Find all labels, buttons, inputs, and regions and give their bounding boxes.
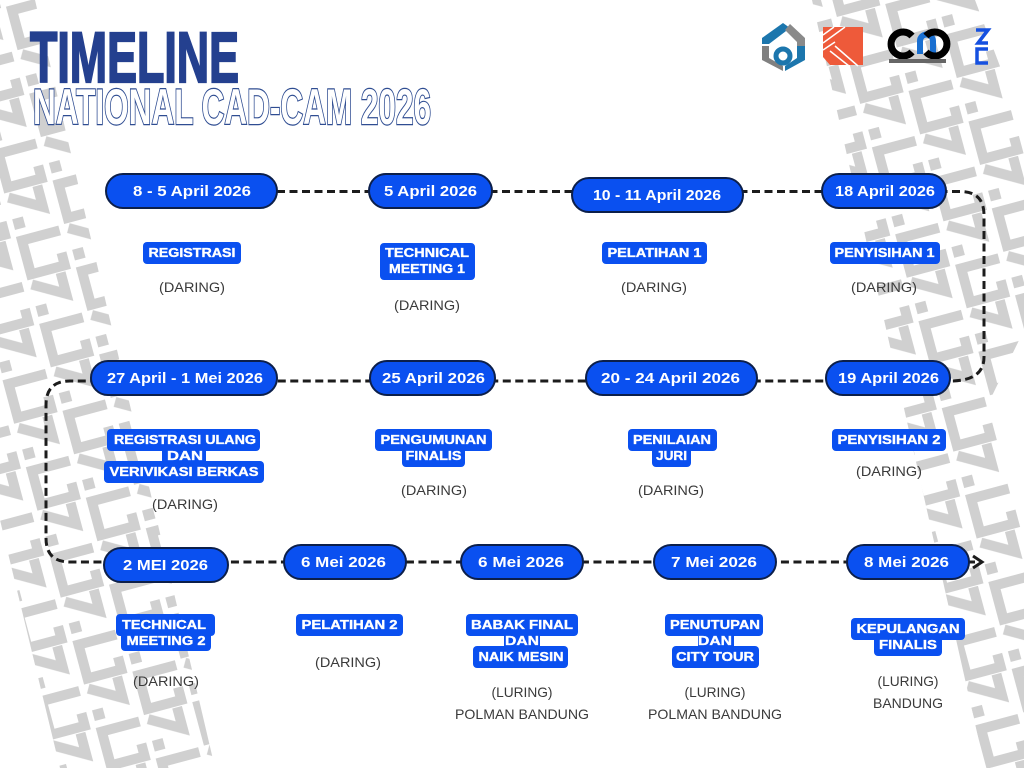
logos <box>762 23 988 71</box>
date pill: 20 - 24 April 2026 <box>586 361 757 395</box>
icon: CNC logo <box>889 32 947 63</box>
label: penutupan dan city tour: CITY TOUR <box>676 649 755 664</box>
arrow head <box>973 556 982 568</box>
background pattern: right band <box>812 0 1024 768</box>
note: luring bandung <box>873 673 943 711</box>
note: luring polman bandung: (LURING) <box>492 684 552 700</box>
note: luring bandung: BANDUNG <box>873 695 943 711</box>
label: penyisihan 2: PENYISIHAN 2 <box>838 432 940 447</box>
date pill: 8 - 5 April 2026 <box>106 174 277 208</box>
label: kepulangan finalis: FINALIS <box>879 637 937 652</box>
background pattern: left band <box>0 0 215 768</box>
label: technical meeting 1: TECHNICAL <box>385 245 469 260</box>
label: registrasi ulang dan verivikasi berkas: VERIVIKASI BERKAS <box>110 464 259 479</box>
date pill: 27 April - 1 Mei 2026: 27 April - 1 Mei 2026 <box>107 370 263 387</box>
label: penilaian juri <box>628 429 717 467</box>
label: registrasi ulang dan verivikasi berkas: REGISTRASI ULANG <box>114 432 256 447</box>
date pill: 7 Mei 2026: 7 Mei 2026 <box>671 554 757 571</box>
label: penilaian juri: PENILAIAN <box>633 432 711 447</box>
icon: blue emblem logo <box>976 30 988 63</box>
note: daring: (DARING) <box>394 297 460 313</box>
note: luring polman bandung: (LURING) <box>684 684 746 700</box>
date pill: 8 Mei 2026 <box>847 545 969 579</box>
date pill: 10 - 11 April 2026 <box>572 178 743 212</box>
label: pengumuman finalis: FINALIS <box>406 448 462 463</box>
label: pelatihan 1: PELATIHAN 1 <box>608 245 702 260</box>
label: penyisihan 1: PENYISIHAN 1 <box>834 245 934 260</box>
date pill: 18 April 2026: 18 April 2026 <box>835 183 935 200</box>
date pill: 18 April 2026 <box>822 174 946 208</box>
label: registrasi ulang dan verivikasi berkas <box>104 429 264 483</box>
label: technical meeting 1 <box>380 243 475 280</box>
note: daring: (DARING) <box>133 673 199 689</box>
label: kepulangan finalis <box>851 618 965 656</box>
label: babak final dan naik mesin: DAN <box>505 633 539 648</box>
date pill: 25 April 2026: 25 April 2026 <box>382 370 485 387</box>
date pill: 20 - 24 April 2026: 20 - 24 April 2026 <box>601 370 740 387</box>
title <box>30 19 431 135</box>
label: penutupan dan city tour: PENUTUPAN <box>670 617 760 632</box>
date pill: 5 April 2026 <box>369 174 492 208</box>
heading: timeline: TIMELINE <box>30 19 239 98</box>
label: penyisihan 2 <box>832 429 946 451</box>
note: daring: (DARING) <box>638 482 704 498</box>
note: luring polman bandung: POLMAN BANDUNG <box>455 706 589 722</box>
label: pengumuman finalis <box>375 429 492 467</box>
label: penilaian juri: JURI <box>656 448 687 463</box>
note: daring: (DARING) <box>159 279 225 295</box>
subheading: national cad-cam 2026: NATIONAL CAD-CAM 2026 <box>33 79 431 135</box>
icon: hexagon logo <box>762 23 805 71</box>
note: luring polman bandung <box>455 684 589 722</box>
date pill: 6 Mei 2026 <box>461 545 583 579</box>
note: daring: (DARING) <box>856 463 922 479</box>
note: luring bandung: (LURING) <box>878 673 938 689</box>
date pill: 6 Mei 2026: 6 Mei 2026 <box>478 554 564 571</box>
date pill: 8 - 5 April 2026: 8 - 5 April 2026 <box>133 183 251 200</box>
label: babak final dan naik mesin: BABAK FINAL <box>471 617 573 632</box>
date pill: 6 Mei 2026: 6 Mei 2026 <box>301 554 386 571</box>
date pill: 25 April 2026 <box>370 361 495 395</box>
date pill: 2 MEI 2026: 2 MEI 2026 <box>123 557 208 574</box>
label: technical meeting 1: MEETING 1 <box>389 261 465 276</box>
label: penyisihan 1 <box>830 242 940 264</box>
date pill: 6 Mei 2026 <box>284 545 406 579</box>
note: daring: (DARING) <box>851 279 917 295</box>
note: daring: (DARING) <box>315 654 381 670</box>
label: babak final dan naik mesin <box>466 614 578 668</box>
note: luring polman bandung: POLMAN BANDUNG <box>648 706 782 722</box>
date pill: 19 April 2026 <box>826 361 950 395</box>
label: registrasi ulang dan verivikasi berkas: DAN <box>167 448 203 463</box>
note: daring: (DARING) <box>401 482 467 498</box>
connector: dashed timeline path <box>46 192 984 562</box>
note: daring: (DARING) <box>152 496 218 512</box>
date pill: 19 April 2026: 19 April 2026 <box>838 370 939 387</box>
label: pelatihan 2: PELATIHAN 2 <box>302 617 398 632</box>
date pill: 2 MEI 2026 <box>104 548 228 582</box>
label: pengumuman finalis: PENGUMUNAN <box>380 432 486 447</box>
label: pelatihan 2 <box>296 614 403 636</box>
label: technical meeting 2: MEETING 2 <box>126 633 206 648</box>
label: penutupan dan city tour: DAN <box>698 633 732 648</box>
note: luring polman bandung <box>648 684 782 722</box>
label: penutupan dan city tour <box>665 614 763 668</box>
date pill: 5 April 2026: 5 April 2026 <box>384 183 477 200</box>
label: technical meeting 2 <box>116 614 215 651</box>
label: registrasi <box>143 242 241 264</box>
date pill: 7 Mei 2026 <box>654 545 776 579</box>
label: pelatihan 1 <box>602 242 707 264</box>
label: registrasi: REGISTRASI <box>148 245 236 260</box>
note: daring: (DARING) <box>621 279 687 295</box>
date pill: 27 April - 1 Mei 2026 <box>91 361 277 395</box>
date pill: 8 Mei 2026: 8 Mei 2026 <box>864 554 949 571</box>
label: technical meeting 2: TECHNICAL <box>122 617 206 632</box>
label: kepulangan finalis: KEPULANGAN <box>856 621 960 636</box>
label: babak final dan naik mesin: NAIK MESIN <box>478 649 564 664</box>
icon: orange K logo <box>823 27 863 66</box>
date pill: 10 - 11 April 2026: 10 - 11 April 2026 <box>593 187 721 204</box>
